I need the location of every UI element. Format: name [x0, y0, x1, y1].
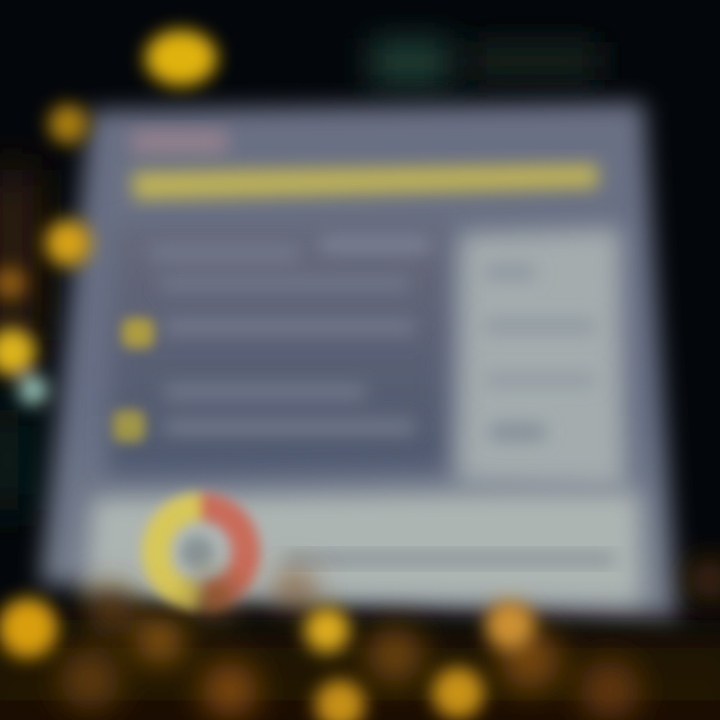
icon: yellow bullet two: [113, 410, 145, 442]
panel: right light column: [457, 228, 626, 488]
text block: left panel lines: [150, 238, 430, 434]
icon: bottom bokeh lights: [0, 598, 535, 720]
heading accent: pink label: [132, 130, 227, 154]
icon: yellow bullet one: [122, 318, 154, 348]
icon: top yellow bokeh light: [145, 30, 217, 86]
heading: yellow title band: [132, 164, 598, 200]
text block: bottom strip lines: [285, 552, 615, 566]
background: left amber and teal glow: [0, 170, 35, 510]
foreground: warm bokeh haze at bottom: [0, 610, 720, 720]
panel: main slide: [40, 102, 678, 620]
chart: donut: [156, 507, 246, 597]
panel: bottom light strip: [85, 492, 642, 606]
icon: left bokeh lights: [0, 104, 91, 405]
foreground: amber blobs: [60, 560, 720, 720]
text block: right column lines: [485, 265, 595, 439]
background: dark teal haze at top: [370, 38, 600, 86]
panel: left content area: [108, 225, 448, 474]
